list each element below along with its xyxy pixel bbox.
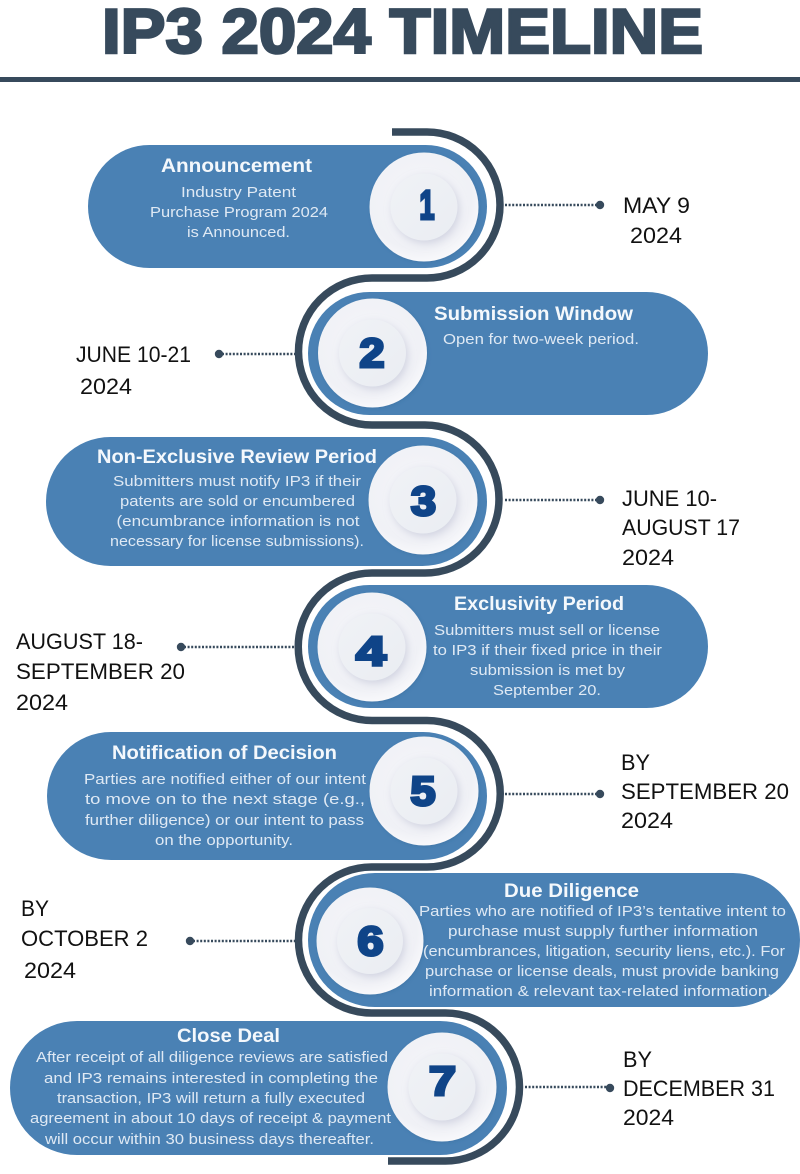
icon: number 7 badge xyxy=(388,1032,496,1142)
description: Parties who are notified of IP3’s tentative intent to xyxy=(419,904,786,920)
description: information & relevant tax-related information. xyxy=(429,984,772,1000)
date: 2024 xyxy=(622,545,674,570)
date: 2024 xyxy=(16,690,68,715)
description: purchase or license deals, must provide banking xyxy=(425,964,779,980)
description: to IP3 if their fixed price in their xyxy=(433,643,662,659)
date xyxy=(621,750,789,833)
heading: Announcement xyxy=(161,156,313,177)
description xyxy=(150,185,328,241)
connector xyxy=(505,201,604,209)
date xyxy=(622,486,740,570)
date xyxy=(76,342,191,399)
date: 2024 xyxy=(80,374,132,399)
step 2: submission window xyxy=(76,292,708,415)
date xyxy=(623,193,690,248)
pill 5 xyxy=(47,732,487,860)
description: agreement in about 10 days of receipt & payment xyxy=(30,1111,391,1127)
description: Submitters must sell or license xyxy=(434,623,660,639)
date: SEPTEMBER 20 xyxy=(16,659,185,684)
heading: Non-Exclusive Review Period xyxy=(97,447,377,468)
icon: number 1 badge xyxy=(370,152,478,262)
heading: Submission Window xyxy=(434,304,633,325)
icon: number 1 badge: 1 xyxy=(420,182,434,228)
description: further diligence) or our intent to pass xyxy=(85,813,364,829)
description: and IP3 remains interested in completing the xyxy=(44,1071,378,1087)
step 5: notification of decision xyxy=(47,732,789,860)
date: 2024 xyxy=(623,1105,674,1130)
description: Purchase Program 2024 xyxy=(150,205,328,221)
description: Submitters must notify IP3 if their xyxy=(113,474,361,490)
pill 7 xyxy=(10,1021,507,1155)
heading: Close Deal xyxy=(177,1026,280,1047)
date xyxy=(623,1047,775,1130)
step 3: non-exclusive review period xyxy=(46,437,740,570)
description: submission is met by xyxy=(470,663,626,679)
date: MAY 9 xyxy=(623,193,690,218)
date: 2024 xyxy=(621,808,673,833)
description xyxy=(84,772,366,849)
connector xyxy=(215,350,295,358)
icon: number 2 badge xyxy=(318,298,427,408)
pill 2 xyxy=(308,292,708,415)
date: BY xyxy=(623,1047,652,1072)
icon: number 6 badge xyxy=(316,888,424,994)
icon: number 5 badge: 5 xyxy=(410,768,436,814)
connector xyxy=(505,496,604,504)
description: is Announced. xyxy=(187,225,290,241)
date: 2024 xyxy=(24,958,76,983)
description: to move on to the next stage (e.g., xyxy=(85,792,365,808)
icon: number 4 badge: 4 xyxy=(356,628,386,674)
description xyxy=(110,474,364,550)
icon: number 2 badge: 2 xyxy=(360,330,384,376)
description: on the opportunity. xyxy=(155,833,293,849)
date: OCTOBER 2 xyxy=(21,926,148,951)
description: (encumbrances, litigation, security liens, etc.). For xyxy=(423,944,785,960)
date: SEPTEMBER 20 xyxy=(621,779,789,804)
description: necessary for license submissions). xyxy=(110,534,364,550)
step 4: exclusivity period xyxy=(16,585,708,715)
connector xyxy=(177,643,295,651)
icon: number 3 badge xyxy=(368,446,478,554)
date: AUGUST 17 xyxy=(622,515,740,540)
step 1: announcement xyxy=(88,145,690,268)
description: Open for two-week period. xyxy=(443,332,639,348)
icon: number 7 badge: 7 xyxy=(429,1058,456,1104)
description: September 20. xyxy=(493,683,601,699)
description: patents are sold or encumbered xyxy=(120,494,355,510)
date: AUGUST 18- xyxy=(16,629,143,654)
serpentine timeline path xyxy=(298,132,520,1161)
description: purchase must supply further information xyxy=(448,924,758,940)
date: DECEMBER 31 xyxy=(623,1076,775,1101)
title underline xyxy=(0,77,800,82)
pill 6 xyxy=(308,873,800,1007)
pill 4 xyxy=(308,585,708,708)
description: (encumbrance information is not xyxy=(116,514,360,530)
step 7: close deal xyxy=(10,1021,775,1155)
description xyxy=(30,1050,391,1148)
pill 1 xyxy=(88,145,487,268)
date xyxy=(21,896,148,983)
step 6: due diligence xyxy=(21,873,800,1007)
date: BY xyxy=(21,896,49,921)
description: After receipt of all diligence reviews are satisfied xyxy=(36,1050,388,1066)
description xyxy=(419,904,786,1000)
description: transaction, IP3 will return a fully executed xyxy=(57,1091,365,1107)
description: Parties are notified either of our intent xyxy=(84,772,366,788)
date: BY xyxy=(621,750,650,775)
icon: number 3 badge: 3 xyxy=(411,478,436,524)
description: Industry Patent xyxy=(181,185,296,201)
date xyxy=(16,629,185,715)
connector xyxy=(186,937,295,945)
description xyxy=(433,623,662,699)
heading: Due Diligence xyxy=(504,881,639,902)
icon: number 6 badge: 6 xyxy=(358,918,384,964)
date: JUNE 10- xyxy=(622,486,717,511)
heading: Notification of Decision xyxy=(112,743,337,764)
description: will occur within 30 business days thereafter. xyxy=(44,1132,374,1148)
icon: number 5 badge xyxy=(370,736,478,846)
pill 3 xyxy=(46,437,487,566)
connector xyxy=(525,1084,614,1092)
date: 2024 xyxy=(630,223,682,248)
connector xyxy=(505,790,604,798)
date: JUNE 10-21 xyxy=(76,342,191,367)
heading: Exclusivity Period xyxy=(454,594,624,615)
icon: number 4 badge xyxy=(318,592,426,702)
